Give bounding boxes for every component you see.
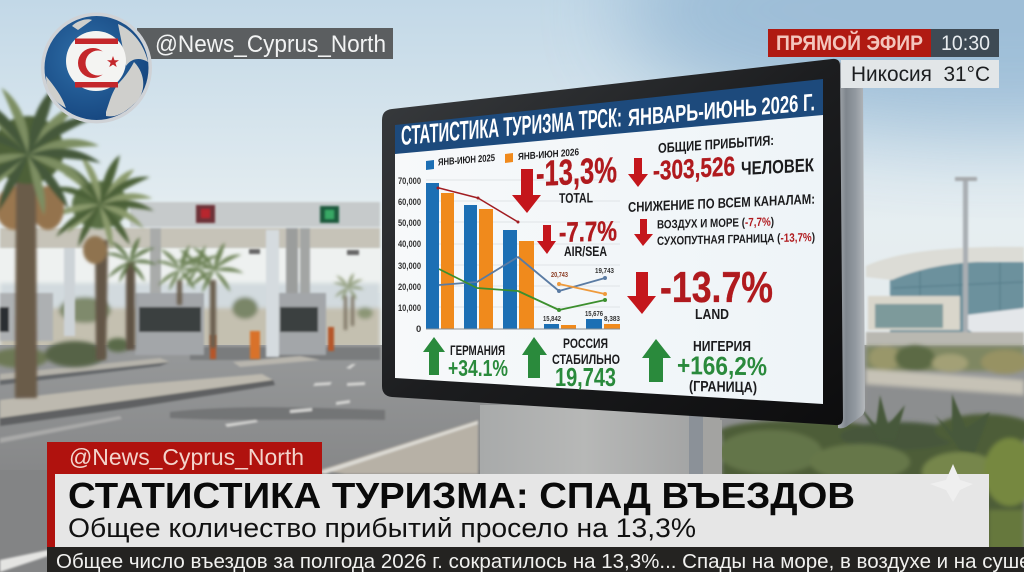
- y axis labels: 40,000: [398, 239, 421, 250]
- stat: total arrivals: ОБЩИЕ ПРИБЫТИЯ:: [658, 132, 774, 156]
- chart legend: ЯНВ-ИЮН 2026: [518, 147, 579, 163]
- y axis labels: 30,000: [398, 261, 421, 272]
- stat: total -13,3%: TOTAL: [559, 189, 593, 206]
- stat: russia: 19,743: [555, 362, 616, 392]
- icon: down arrow air sea: [537, 225, 556, 254]
- globe landmasses: [46, 19, 148, 116]
- screen title bar: ЯНВАРЬ-ИЮНЬ 2026 Г.: [628, 89, 815, 132]
- billboard bezel: [382, 59, 843, 425]
- y axis labels: 50,000: [398, 218, 421, 229]
- sign post: [480, 405, 720, 475]
- channel handle label: @News_Cyprus_North: [155, 31, 386, 58]
- y axis labels: 10,000: [398, 303, 421, 314]
- screen title bar: СТАТИСТИКА ТУРИЗМА ТРСК:: [401, 102, 622, 151]
- y axis labels: [398, 176, 421, 335]
- stat: land -13.7%: [660, 263, 773, 323]
- foreground shrubs: [716, 394, 1024, 572]
- stat: nigeria: (ГРАНИЦА): [689, 378, 757, 396]
- stat: total -13,3%: -13,3%: [536, 149, 617, 194]
- stat: nigeria: [677, 338, 767, 396]
- chart data labels: 20,743: [551, 272, 568, 279]
- screen: [395, 113, 823, 404]
- y axis labels: 70,000: [398, 176, 421, 187]
- billboard: [382, 59, 865, 428]
- text: decline across all channels: СУХОПУТНАЯ ГРАНИЦА (-13,7%): [657, 230, 815, 248]
- airport terminal: [866, 177, 1024, 346]
- y axis labels: 20,000: [398, 282, 421, 293]
- icon: up arrow russia: [522, 337, 547, 378]
- stat: air sea -7.7%: [559, 215, 617, 259]
- chart data labels: 15,676: [585, 311, 603, 318]
- lower third red tag: @News_Cyprus_North: [69, 444, 304, 470]
- flag disc: [66, 31, 126, 91]
- stat: air sea -7.7%: -7.7%: [559, 215, 617, 248]
- live badge and clock: ПРЯМОЙ ЭФИР: [776, 31, 923, 55]
- stat: land -13.7%: LAND: [695, 306, 729, 323]
- stat: russia: РОССИЯ: [563, 335, 608, 351]
- chart data labels: 8,383: [604, 316, 620, 323]
- roadside hedge and walkway right: [866, 345, 1024, 425]
- icon: down arrow arrivals: [628, 158, 648, 187]
- stat: total arrivals: ЧЕЛОВЕК: [741, 155, 814, 180]
- hedges left: [0, 338, 130, 368]
- chart legend: ЯНВ-ИЮН 2025: [438, 153, 495, 168]
- trend lines: [439, 188, 605, 310]
- stat: germany: ГЕРМАНИЯ: [450, 342, 505, 358]
- channel logo: globe with flag: [41, 12, 152, 124]
- stat: russia: СТАБИЛЬНО: [552, 351, 620, 367]
- chart data labels: 15,842: [543, 316, 561, 323]
- chart legend: [426, 147, 579, 170]
- location and temperature: Никосия 31°C: [851, 63, 990, 86]
- chart data labels: 19,743: [595, 268, 614, 275]
- live badge and clock: 10:30: [941, 32, 990, 55]
- lower third: [47, 442, 1024, 572]
- road lanes: [0, 358, 170, 382]
- y axis labels: 60,000: [398, 197, 421, 208]
- stat: total -13,3%: [536, 149, 617, 206]
- stat: total arrivals: -303,526: [653, 151, 735, 186]
- icon: down arrow total: [512, 169, 541, 213]
- icon: down arrow channels: [634, 219, 653, 246]
- stat: germany: +34.1%: [448, 355, 508, 381]
- stat: russia: [552, 335, 620, 392]
- stat: air sea -7.7%: AIR/SEA: [564, 243, 607, 259]
- lower third red tag: [47, 442, 322, 548]
- stat: nigeria: НИГЕРИЯ: [693, 338, 751, 355]
- blue bars 2025: [426, 183, 602, 329]
- bar and line chart: [398, 176, 620, 335]
- stat: land -13.7%: -13.7%: [660, 263, 773, 312]
- icon: up arrow germany: [423, 337, 445, 375]
- stat: nigeria: +166,2%: [677, 350, 767, 381]
- y axis labels: 0: [416, 324, 421, 335]
- headline panel: [55, 464, 989, 547]
- billboard frame: [838, 60, 865, 428]
- palm trees: [0, 74, 364, 398]
- icon: down arrow land: [627, 272, 656, 314]
- chart data labels: [543, 268, 620, 323]
- live badge and clock: [768, 29, 999, 57]
- orange bars 2026: [441, 193, 620, 329]
- text: decline across all channels: ВОЗДУХ И МОРЕ (-7,7%): [657, 215, 774, 231]
- icon: up arrow nigeria: [642, 339, 671, 382]
- text: decline across all channels: СНИЖЕНИЕ ПО ВСЕМ КАНАЛАМ:: [628, 191, 815, 215]
- signal lights: [196, 205, 339, 223]
- canopy with columns and booths: [0, 202, 380, 359]
- text: decline across all channels: [628, 191, 815, 248]
- stat: germany: [448, 342, 508, 381]
- headline panel: Общее количество прибытий просело на 13,3%: [68, 513, 696, 543]
- headline panel: СТАТИСТИКА ТУРИЗМА: СПАД ВЪЕЗДОВ: [68, 475, 855, 516]
- stat: total arrivals: [628, 132, 814, 187]
